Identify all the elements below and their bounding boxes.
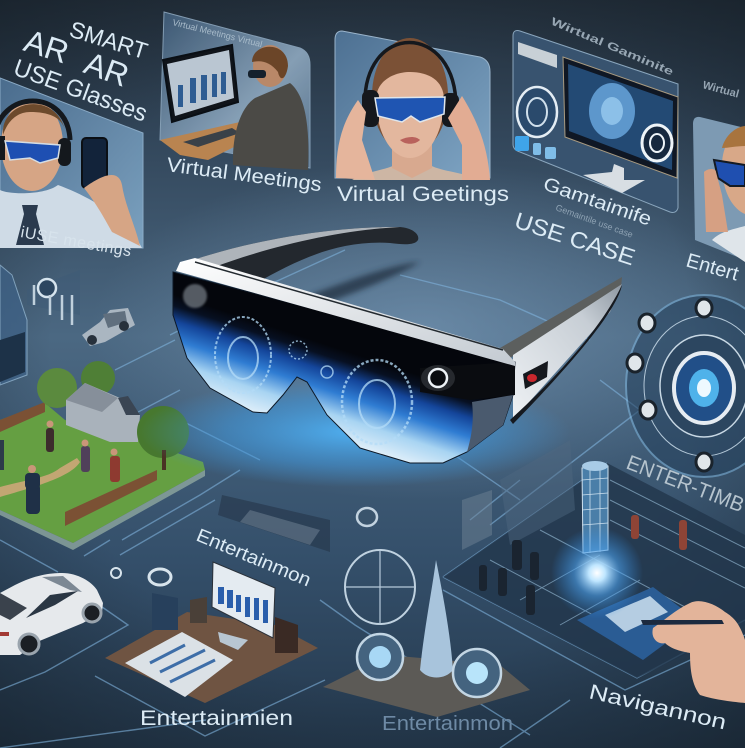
text: Navigation: Navigannon [587,680,728,734]
bar chart [218,587,268,623]
panel: gamification monitor [513,16,678,213]
heading: Smart AR Use Glasses: SMART [67,16,151,64]
heading: Smart AR Use Glasses: USE Glasses [10,54,151,128]
heading: Smart AR Use Glasses: AR [80,45,134,94]
text: Gamification Use Cases: Gemaintile use case [554,202,634,240]
panel: house and lawn [0,361,205,550]
top white frame band [176,258,515,366]
temple arm right [500,277,622,358]
text: Gamification Use Cases: USE CASE [511,207,638,270]
panel: virtual geetings woman [335,31,509,206]
panel: gamification monitor: Wirtual Gaminite [549,16,675,78]
text: Entertainmien bottom: Entertainmien [140,707,293,730]
panel: far right user [684,79,745,286]
glow under glasses [140,377,570,487]
black band on lens [420,362,515,400]
sensor housing [523,361,548,389]
camera [421,365,455,391]
lens [173,272,515,463]
panel: top-left smart glasses user [0,78,143,260]
AR glasses [140,227,622,487]
text: Entertainmon middle: Entertainmon [193,525,314,591]
panel: tower and rings [323,550,530,735]
panel: white car [0,573,103,655]
temple arm left [193,227,418,285]
shadow behind glasses [310,262,420,305]
grey lens corner [467,395,513,452]
icon: AR radial HUD [626,295,745,477]
text: Virtual Meetings: Virtual Meetings [165,154,323,196]
text: Virtual Geetings: Virtual Geetings [337,183,509,206]
panel: city sketch and car [0,265,135,385]
lens graphics [215,317,412,444]
people on lawn [0,420,120,514]
panel: center floating panels [111,495,377,585]
heading: Smart AR Use Glasses [10,16,151,128]
panel: bar chart desk [105,562,318,703]
panel: far right user: Wirtual [701,79,740,101]
text: Use Meetings: iUSE meetings [19,224,133,260]
text: Gamification Use Cases: Gamtaimife [540,174,654,231]
panel: virtual meetings: Virtual Meetings Virtual [172,17,263,49]
icon: hand with pen [641,601,745,703]
lens reflection [183,284,207,308]
red sensor [527,374,537,382]
text: Entertainment label: Entert [684,250,741,286]
text: Gamification Use Cases [511,174,654,270]
panel: virtual meetings [160,12,323,196]
panel: real-time city map [443,440,745,734]
text: Entertainon: Entertainmon [382,713,513,735]
heading: Smart AR Use Glasses: AR [20,22,73,70]
